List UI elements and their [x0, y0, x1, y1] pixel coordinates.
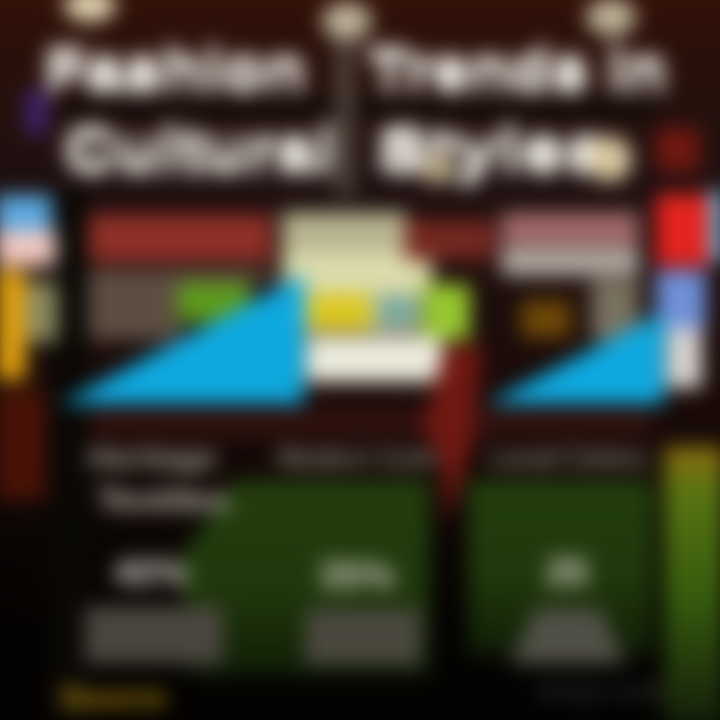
- footer credit: Design credit: [538, 681, 665, 703]
- column text: left: [78, 436, 239, 524]
- title: Styles: [376, 118, 608, 183]
- title: Fashion: [44, 38, 306, 101]
- title: [31, 30, 680, 200]
- panel: right header: [394, 197, 654, 352]
- dark red divider row: [90, 410, 650, 436]
- stat: left: [74, 544, 234, 676]
- green field: centre: [180, 480, 430, 675]
- column text: left: Textiles: [98, 484, 229, 517]
- stat: right: 25: [546, 552, 588, 594]
- footer label: Source: [60, 682, 166, 714]
- panel: centre header: [265, 196, 486, 400]
- stat: left: 40%: [113, 552, 189, 594]
- stat: centre: [294, 548, 431, 676]
- red ribbon: [422, 345, 482, 525]
- stat: right: [504, 544, 632, 676]
- column text: centre: Modern Cuts: [278, 442, 437, 472]
- stat: centre: 35%: [319, 555, 395, 597]
- column text: left: Heritage: [88, 442, 217, 473]
- left dark pillar: [50, 190, 88, 720]
- green field: right: [468, 480, 653, 655]
- title: Trends in: [368, 38, 667, 101]
- left edge decoration: [0, 78, 73, 510]
- title accent dots: [410, 122, 647, 198]
- title: Cultural: [64, 118, 336, 183]
- hanging lamps: [50, 0, 650, 54]
- column text: right: Local Colors: [490, 442, 647, 472]
- panel: left header: [74, 200, 286, 352]
- right edge decoration: [639, 116, 720, 404]
- title shadow band: [60, 98, 660, 116]
- central light pillar: [335, 30, 355, 195]
- green field: far right: [664, 446, 720, 720]
